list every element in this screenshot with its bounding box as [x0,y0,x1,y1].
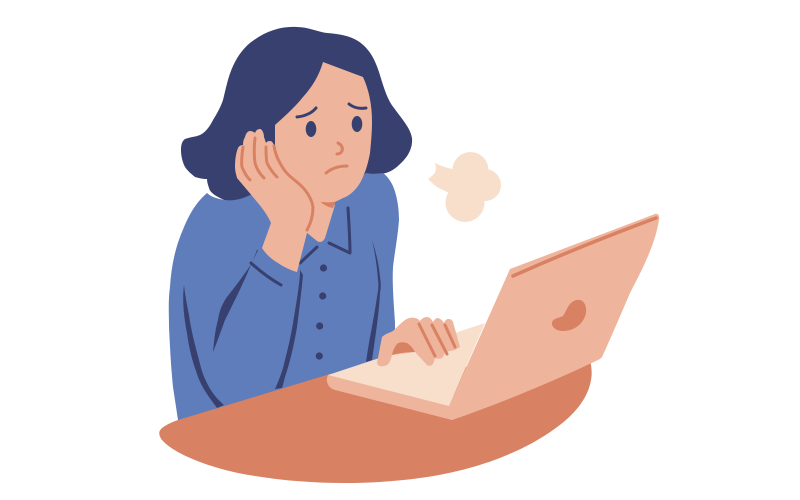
shirt folds and collar [183,208,381,408]
mouth [326,166,347,173]
table [159,360,592,483]
laptop [327,214,659,420]
neck [300,195,335,242]
nose [337,143,342,154]
shirt buttons [316,264,327,360]
knuckle shadow [392,342,415,355]
hand on keyboard [377,317,460,366]
eyes [306,116,362,137]
lid edge line [513,218,656,276]
laptop logo [552,300,586,331]
hand on cheek [235,129,313,272]
neck shadow [317,197,336,208]
eyebrows [297,104,366,117]
face [275,62,372,202]
hair [181,27,412,201]
shirt body [169,173,399,420]
keyboard deck [328,323,485,406]
laptop lid [449,214,659,420]
puff of steam [428,152,501,222]
laptop base [327,375,500,420]
